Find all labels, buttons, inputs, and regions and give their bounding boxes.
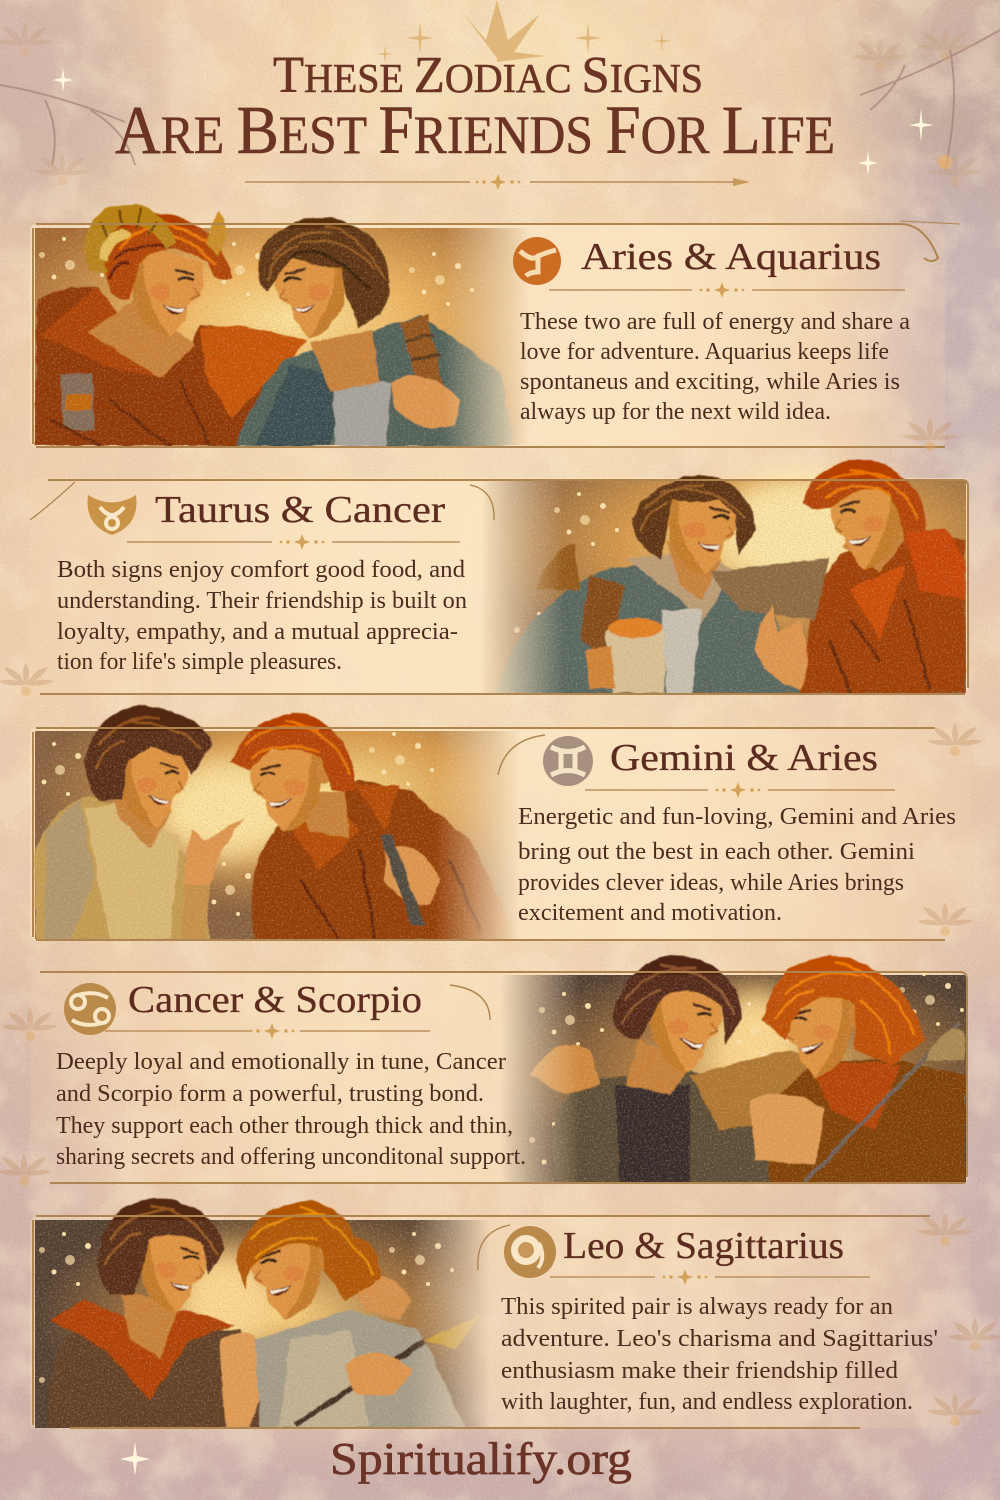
- body text: tion for life's simple pleasures.: [57, 649, 342, 675]
- body text: They support each other through thick and thin,: [56, 1113, 513, 1139]
- sunburst ornament: [377, 0, 671, 63]
- divider ornament: [550, 1269, 870, 1285]
- panel 3: Gemini and Aries: [29, 705, 983, 940]
- body text: These two are full of energy and share a: [520, 309, 910, 335]
- body text: love for adventure. Aquarius keeps life: [520, 339, 889, 365]
- icon: Gemini symbol: [543, 736, 593, 786]
- corner floral decoration: [0, 23, 1000, 186]
- frame lines: [0, 480, 968, 696]
- heading: Leo & Sagittarius: Leo & Sagittarius: [563, 1225, 844, 1267]
- body text: [56, 1049, 526, 1170]
- frame lines: [33, 1213, 1000, 1428]
- illustration: Cancer and Scorpio friends: [500, 955, 966, 1183]
- body text: excitement and motivation.: [518, 900, 782, 926]
- body text: sharing secrets and offering unconditonal support.: [56, 1144, 526, 1170]
- body text: and Scorpio form a powerful, trusting bond.: [56, 1081, 484, 1107]
- panel 5: Leo and Sagittarius: [30, 1198, 1000, 1428]
- body text: understanding. Their friendship is built on: [57, 588, 467, 614]
- heading: Cancer & Scorpio: Cancer & Scorpio: [128, 979, 422, 1021]
- body text: adventure. Leo's charisma and Sagittarius': [501, 1326, 938, 1352]
- body text: Energetic and fun-loving, Gemini and Aries: [518, 804, 956, 830]
- panel 1: Aries and Aquarius: [30, 205, 960, 451]
- divider ornament: [105, 1023, 430, 1039]
- panel 2: Taurus and Cancer: [0, 460, 968, 696]
- illustration: Leo and Sagittarius friends: [35, 1198, 490, 1428]
- heading: Taurus & Cancer: Taurus & Cancer: [155, 489, 445, 531]
- illustration: Taurus and Cancer friends: [480, 460, 966, 693]
- icon: Aries symbol: [513, 237, 561, 285]
- panel 4 light backing: [30, 972, 968, 1183]
- icon: Leo symbol: [504, 1226, 556, 1278]
- body text: always up for the next wild idea.: [520, 399, 831, 425]
- title: THESE ZODIAC SIGNS: [273, 47, 703, 104]
- divider ornament: [127, 534, 460, 550]
- panel 5 light backing: [30, 1217, 970, 1428]
- body text: [518, 804, 956, 926]
- body text: Deeply loyal and emotionally in tune, Cancer: [56, 1049, 506, 1075]
- title: [115, 47, 835, 168]
- icon: Taurus symbol: [88, 495, 136, 535]
- panel 1 light backing: [30, 224, 945, 446]
- footer: Spiritualify.org: Spiritualify.org: [330, 1433, 632, 1484]
- body text: [520, 309, 910, 425]
- illustration: Gemini and Aries friends: [29, 705, 525, 940]
- body text: [501, 1294, 938, 1415]
- divider ornament: [585, 782, 895, 798]
- body text: [57, 557, 467, 675]
- title divider: [245, 174, 750, 190]
- panel 4: Cancer and Scorpio: [0, 955, 968, 1186]
- panel 2 light backing: [30, 478, 968, 694]
- icon: Cancer symbol: [64, 983, 116, 1035]
- body text: provides clever ideas, while Aries brings: [518, 870, 904, 896]
- panel 3 light backing: [30, 728, 970, 940]
- body text: with laughter, fun, and endless exploration.: [501, 1389, 913, 1415]
- heading: Aries & Aquarius: Aries & Aquarius: [581, 236, 881, 278]
- frame lines: [0, 972, 967, 1186]
- title: ARE BEST FRIENDS FOR LIFE: [115, 92, 835, 168]
- heading: Gemini & Aries: Gemini & Aries: [610, 737, 878, 779]
- divider ornament: [549, 282, 905, 298]
- body text: This spirited pair is always ready for an: [501, 1294, 893, 1320]
- body text: loyalty, empathy, and a mutual apprecia-: [57, 619, 458, 645]
- frame lines: [33, 221, 960, 451]
- body text: spontaneus and exciting, while Aries is: [520, 369, 900, 395]
- frame lines: [33, 723, 983, 940]
- illustration: Aries and Aquarius friends: [35, 205, 530, 446]
- body text: bring out the best in each other. Gemini: [518, 839, 915, 865]
- body text: enthusiasm make their friendship filled: [501, 1358, 898, 1384]
- body text: Both signs enjoy comfort good food, and: [57, 557, 465, 583]
